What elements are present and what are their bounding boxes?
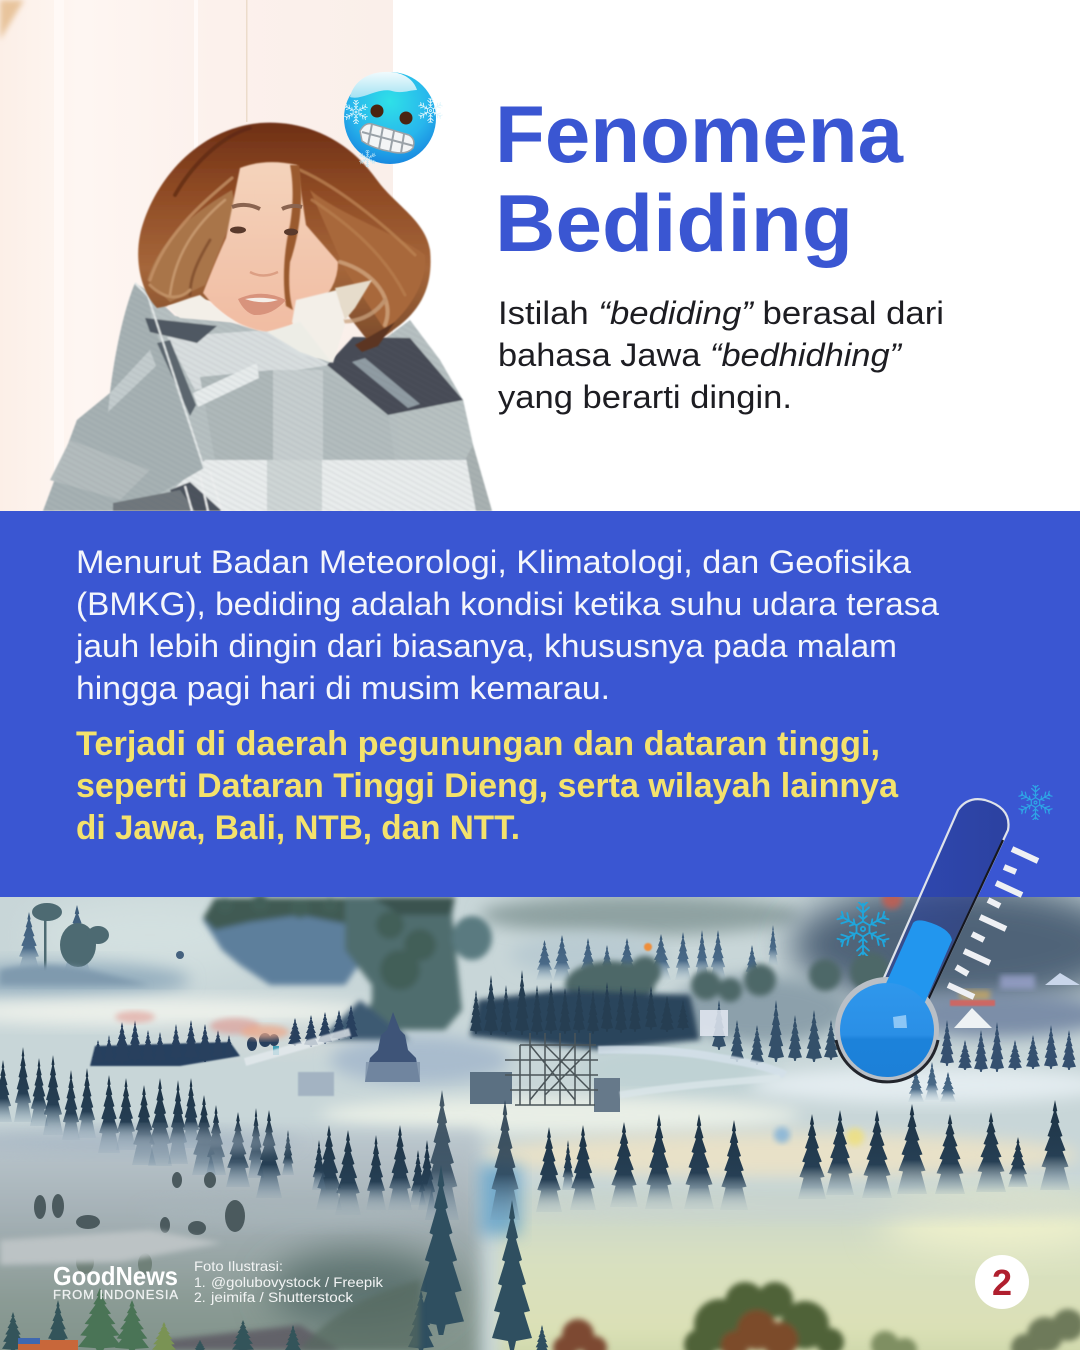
definition text: Menurut Badan Meteorologi, Klimatologi, dan Geofisika <box>76 544 911 580</box>
highlighted location text: seperti Dataran Tinggi Dieng, serta wilayah lainnya <box>76 767 899 805</box>
icon: freezing face emoji <box>344 72 443 167</box>
thermometer liquid <box>884 920 952 1002</box>
thermometer tube <box>883 799 1009 1000</box>
icon: small snowflake <box>1018 785 1053 820</box>
bottom-right autumn trees <box>553 1282 1080 1350</box>
photo: misty Dieng landscape <box>0 883 1080 1350</box>
thermometer bulb ring <box>835 977 939 1081</box>
terraced fields <box>0 1230 420 1350</box>
intro text: yang berarti dingin. <box>498 379 792 415</box>
mist over tree bases <box>0 1130 1080 1226</box>
hair <box>138 123 431 352</box>
highlighted location text: Terjadi di daerah pegunungan dan dataran tinggi, <box>76 725 880 763</box>
mist base <box>0 883 1080 1350</box>
intro text: bahasa Jawa “bedhidhing” <box>498 337 902 373</box>
photo credits: jeimifa / Shutterstock <box>210 1289 354 1305</box>
definition text: (BMKG), bediding adalah kondisi ketika suhu udara terasa <box>76 586 939 622</box>
white path on the left <box>245 1032 350 1062</box>
dark scarf bands <box>145 318 217 343</box>
shrubs on the terraces <box>34 1172 245 1275</box>
back tree row <box>536 925 778 981</box>
photo credits: @golubovystock / Freepik <box>211 1274 384 1290</box>
highlighted location text: di Jawa, Bali, NTB, dan NTT. <box>76 809 520 847</box>
logo: GoodNews from Indonesia: GoodNews <box>53 1261 178 1291</box>
photo: woman wrapped in a scarf <box>0 0 492 511</box>
left diagonal tree row <box>0 1047 436 1215</box>
logo: GoodNews from Indonesia <box>53 1261 178 1302</box>
tall central trees <box>408 1090 549 1350</box>
definition text: jauh lebih dingin dari biasanya, khususnya pada malam <box>75 628 897 664</box>
page number badge: 2 <box>992 1262 1012 1303</box>
page number badge <box>975 1255 1029 1309</box>
temple <box>298 1012 620 1112</box>
title <box>495 90 904 269</box>
left scarf flap <box>43 283 204 511</box>
foreground centre tree row <box>536 1100 1070 1212</box>
panel: BMKG definition <box>0 511 1080 897</box>
small left tree row <box>90 1005 358 1066</box>
thermometer scale <box>948 849 1038 997</box>
hair lock over face <box>284 165 301 310</box>
highlighted location text <box>76 725 899 847</box>
photo credits: 2. <box>194 1289 206 1305</box>
facial features <box>230 205 302 315</box>
photo credits: Foto Ilustrasi: <box>194 1258 283 1274</box>
photo background curtain <box>0 0 393 511</box>
far-right tree row <box>908 1020 1076 1102</box>
definition text <box>75 544 939 706</box>
scarf <box>43 283 492 511</box>
definition text: hingga pagi hari di musim kemarau. <box>76 670 610 706</box>
hill with trees <box>203 894 492 1040</box>
scaffolding <box>505 1033 598 1105</box>
top-left trees <box>0 903 184 985</box>
bottom foreground trees <box>2 1288 301 1350</box>
photo credits: 1. <box>194 1274 206 1290</box>
tents and festival colours <box>644 889 1080 1146</box>
title: Fenomena <box>495 90 904 180</box>
dense forest block <box>470 970 838 1065</box>
logo: GoodNews from Indonesia: FROM INDONESIA <box>53 1287 178 1302</box>
intro text: Istilah “bediding” berasal dari <box>498 295 944 331</box>
knit collar <box>167 280 372 363</box>
icon: thermometer <box>835 799 1038 1082</box>
icon: large snowflake <box>837 902 889 956</box>
photo credits <box>194 1258 384 1305</box>
green tree clumps <box>565 952 890 1009</box>
title: Bediding <box>495 179 853 269</box>
face <box>203 162 338 332</box>
intro text <box>498 295 944 415</box>
path ring around temple <box>598 1050 785 1095</box>
